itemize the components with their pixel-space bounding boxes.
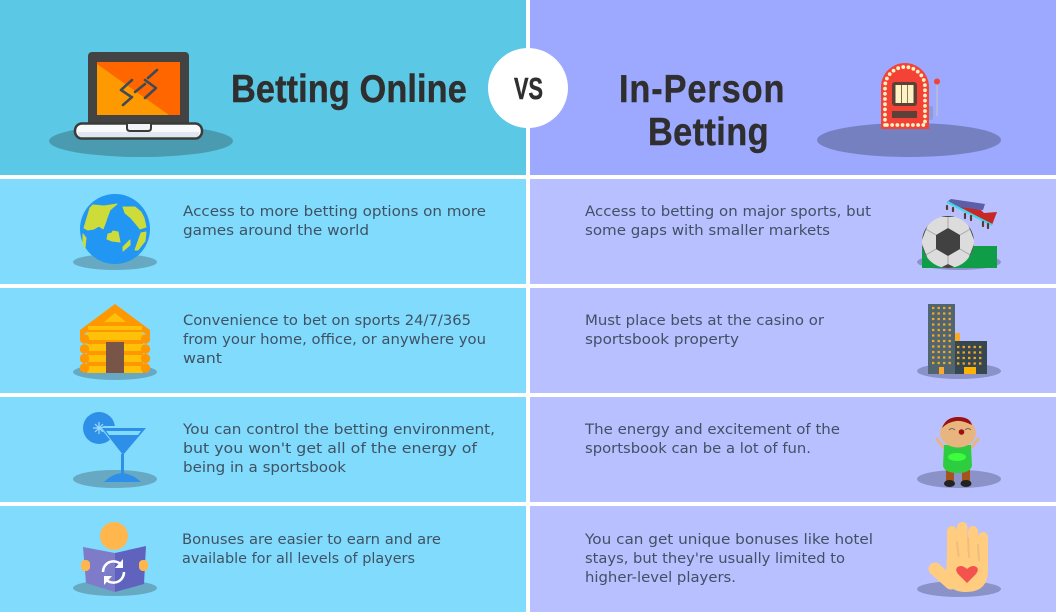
icon: cocktail xyxy=(73,412,157,488)
icon: laptop xyxy=(49,52,233,157)
icon: cheering kid xyxy=(917,417,1001,488)
text: in-person row 2: sportsbook property xyxy=(585,332,740,348)
icon: slot machine xyxy=(817,63,1001,157)
badge: VS: VS xyxy=(514,71,543,106)
text: in-person row 2 xyxy=(585,313,824,348)
text: in-person row 1: Access to betting on major sports, but xyxy=(585,204,871,220)
heading: In-Person Betting: In-Person xyxy=(619,67,784,110)
text: online row 3: You can control the betting environment, xyxy=(182,422,495,438)
icon: reader with book xyxy=(73,522,157,596)
text: in-person row 3 xyxy=(584,422,840,457)
text: in-person row 4 xyxy=(584,532,873,586)
panel: in-person row 2 xyxy=(530,288,1056,393)
heading: Betting Online: Betting Online xyxy=(231,67,467,110)
panel: online row 3 xyxy=(0,397,526,502)
text: online row 4: Bonuses are easier to earn and are xyxy=(182,532,441,548)
text: online row 3: but you won't get all of the energy of xyxy=(183,441,478,457)
text: in-person row 3: sportsbook can be a lot of fun. xyxy=(585,441,811,457)
text: online row 1 xyxy=(183,204,486,239)
panel: in-person row 4 xyxy=(530,506,1056,612)
text: in-person row 1: some gaps with smaller markets xyxy=(585,223,830,239)
text: online row 2 xyxy=(183,313,486,367)
panel: online row 4 xyxy=(0,506,526,612)
panel: in-person header xyxy=(530,0,1056,175)
text: online row 3: being in a sportsbook xyxy=(183,460,347,476)
panel: online header xyxy=(0,0,526,175)
text: online row 4 xyxy=(182,532,441,567)
text: online row 2: from your home, office, or anywhere you xyxy=(183,332,486,348)
icon: globe xyxy=(73,194,157,270)
icon: hand with heart xyxy=(917,522,1001,597)
icon: soccer ball and boot xyxy=(917,199,1001,270)
panel: online row 2 xyxy=(0,288,526,393)
text: in-person row 1 xyxy=(585,204,871,239)
text: online row 4: available for all levels of players xyxy=(182,551,415,567)
icon: log cabin xyxy=(73,304,157,380)
text: online row 2: Convenience to bet on sports 24/7/365 xyxy=(183,313,471,329)
badge: VS xyxy=(488,48,568,128)
text: in-person row 4: higher-level players. xyxy=(585,570,736,586)
text: online row 3 xyxy=(182,422,495,476)
text: online row 1: Access to more betting options on more xyxy=(183,204,486,220)
text: in-person row 2: Must place bets at the casino or xyxy=(585,313,824,329)
heading: In-Person Betting xyxy=(619,67,784,153)
panel: in-person row 3 xyxy=(530,397,1056,502)
text: in-person row 3: The energy and excitement of the xyxy=(584,422,840,438)
panel: online row 1 xyxy=(0,179,526,284)
text: in-person row 4: stays, but they're usually limited to xyxy=(585,551,845,567)
text: online row 2: want xyxy=(183,351,222,367)
heading: In-Person Betting: Betting xyxy=(648,110,769,153)
panel: in-person row 1 xyxy=(530,179,1056,284)
text: in-person row 4: You can get unique bonuses like hotel xyxy=(584,532,873,548)
icon: casino buildings xyxy=(917,304,1001,379)
text: online row 1: games around the world xyxy=(183,223,369,239)
